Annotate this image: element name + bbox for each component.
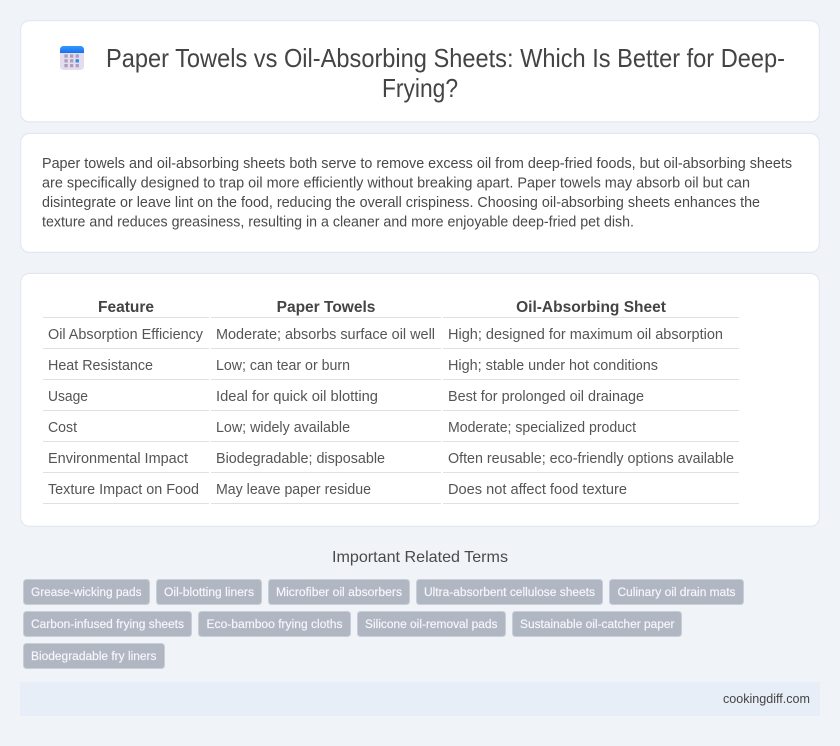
row: cost: [43, 420, 739, 442]
intro panel: [21, 133, 819, 252]
tag: Biodegradable fry liners: [31, 649, 156, 663]
row: cost: Moderate; specialized product: [448, 420, 636, 436]
footer: cookingdiff.com: [723, 691, 810, 706]
row: cost: Low; widely available: [216, 420, 350, 436]
intro text block: texture and reduces greasiness, resulting in a cleaner and more enjoyable deep-fried pet dish.: [42, 214, 634, 230]
tag: Grease-wicking pads: [31, 585, 142, 599]
row: texture impact on food: Does not affect food texture: [448, 482, 627, 498]
table header row: [43, 299, 739, 318]
row: heat resistance: High; stable under hot conditions: [448, 358, 658, 374]
tag: Ultra-absorbent cellulose sheets: [424, 585, 595, 599]
row: heat resistance: Heat Resistance: [48, 358, 153, 374]
icon: calendar: [60, 46, 84, 70]
header panel: [21, 21, 819, 122]
row: oil absorption efficiency: Oil Absorption Efficiency: [48, 327, 204, 343]
tag: Oil-blotting liners: [164, 585, 254, 599]
row: environmental impact: Environmental Impact: [48, 451, 188, 467]
row: usage: Best for prolonged oil drainage: [448, 389, 644, 405]
tag: [24, 644, 164, 668]
row: texture impact on food: Texture Impact on Food: [48, 482, 199, 498]
row: cost: Cost: [48, 420, 77, 436]
row: usage: Ideal for quick oil blotting: [216, 389, 378, 405]
row: texture impact on food: May leave paper residue: [216, 482, 371, 498]
tag: Silicone oil-removal pads: [365, 617, 498, 631]
row: oil absorption efficiency: [43, 327, 739, 348]
row: heat resistance: [43, 358, 739, 380]
heading: important related terms: Important Related Terms: [332, 549, 508, 566]
tag: [512, 612, 682, 636]
footer: [20, 682, 820, 716]
title: Frying?: [382, 73, 458, 103]
row: environmental impact: Biodegradable; disposable: [216, 451, 385, 467]
related terms tags: [24, 580, 744, 668]
intro text block: [42, 156, 792, 230]
panel: comparison table: [21, 273, 819, 526]
row: usage: [43, 389, 739, 410]
table header row: Feature: [98, 299, 154, 316]
tag: Eco-bamboo frying cloths: [206, 617, 342, 631]
tag: [358, 612, 506, 636]
title: [106, 43, 785, 103]
tag: Microfiber oil absorbers: [276, 585, 402, 599]
row: environmental impact: Often reusable; eco-friendly options available: [448, 451, 734, 467]
tag: Sustainable oil-catcher paper: [520, 617, 674, 631]
tag: [198, 612, 350, 636]
intro text block: are specifically designed to trap oil more efficiently without breaking apart. Paper towels may absorb oil but can: [42, 176, 750, 192]
tag: [156, 580, 262, 604]
row: texture impact on food: [43, 482, 739, 504]
tag: [610, 580, 744, 604]
tag: [24, 580, 150, 604]
row: environmental impact: [43, 451, 739, 472]
row: oil absorption efficiency: Moderate; absorbs surface oil well: [216, 327, 435, 343]
row: oil absorption efficiency: High; designed for maximum oil absorption: [448, 327, 723, 343]
tag: Culinary oil drain mats: [618, 585, 736, 599]
tag: Carbon-infused frying sheets: [31, 617, 184, 631]
row: usage: Usage: [48, 389, 88, 405]
table header row: Oil-Absorbing Sheet: [516, 299, 666, 316]
intro text block: disintegrate or leave lint on the food, reducing the overall crispiness. Choosing oil-absorbing sheets enhances the: [42, 195, 760, 211]
title: Paper Towels vs Oil-Absorbing Sheets: Which Is Better for Deep-: [106, 43, 785, 73]
tag: [416, 580, 602, 604]
tag: [24, 612, 192, 636]
row: heat resistance: Low; can tear or burn: [216, 358, 350, 374]
table header row: Paper Towels: [277, 299, 375, 316]
intro text block: Paper towels and oil-absorbing sheets both serve to remove excess oil from deep-fried foods, but oil-absorbing sheets: [42, 156, 792, 172]
tag: [268, 580, 410, 604]
